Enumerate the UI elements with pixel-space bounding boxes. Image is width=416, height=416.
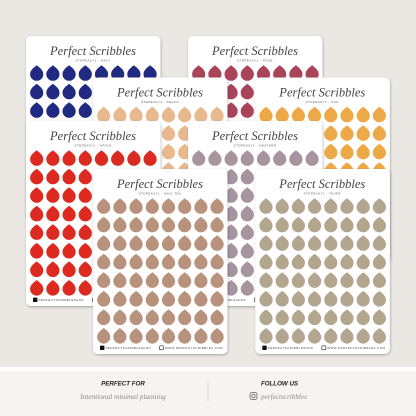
rose subtitle: STDPEASY1 - ROSE (237, 58, 273, 62)
rose title: Perfect Scribbles (211, 44, 298, 58)
taupe subtitle: STDPEASY1 - TAUPE (304, 192, 341, 196)
panel: sun sheet (255, 78, 390, 262)
milk tea subtitle: STDPEASY1 - MILK TEA (139, 192, 181, 196)
perfect for heading: PERFECT FOR (101, 381, 145, 388)
navy title: Perfect Scribbles (49, 44, 136, 58)
peach subtitle: STDPEASY1 - PEACH (141, 100, 179, 104)
panel: footer band (0, 371, 416, 416)
instagram handle: perfectscribbles (260, 393, 307, 401)
apple subtitle: STDPEASY1 - APPLE (74, 144, 112, 148)
heather title: Perfect Scribbles (211, 129, 298, 143)
panel: apple sheet (26, 121, 160, 306)
taupe drops (259, 198, 386, 344)
panel: milk tea sheet (93, 169, 228, 354)
taupe title: Perfect Scribbles (278, 177, 365, 191)
white strip (0, 367, 416, 371)
panel: navy sheet (26, 36, 160, 221)
taupe footer (262, 346, 385, 350)
sun subtitle: STDPEASY1 - SUN (306, 100, 339, 104)
icon: instagram (250, 392, 257, 400)
perfect for text: Intentional minimal planning (79, 392, 166, 401)
panel: taupe sheet (255, 169, 390, 354)
rose drops (192, 65, 319, 211)
panel: peach sheet (93, 78, 228, 262)
heather footer (195, 298, 318, 302)
panel: rose sheet (188, 36, 322, 221)
apple title: Perfect Scribbles (49, 129, 136, 143)
apple footer (33, 298, 156, 302)
panel: heather sheet (188, 121, 322, 306)
apple drops (30, 150, 157, 296)
peach drops (97, 107, 224, 252)
sun title: Perfect Scribbles (278, 86, 365, 100)
milk tea title: Perfect Scribbles (116, 177, 203, 191)
follow us heading: FOLLOW US (261, 381, 299, 388)
navy drops (30, 65, 157, 211)
divider (208, 380, 209, 402)
peach title: Perfect Scribbles (116, 86, 203, 100)
heather drops (192, 150, 319, 296)
heather subtitle: STDPEASY1 - HEATHER (234, 144, 276, 148)
milk tea drops (97, 198, 224, 344)
milk tea footer (100, 346, 223, 350)
navy subtitle: STDPEASY1 - NAVY (75, 58, 111, 62)
sun drops (259, 107, 386, 252)
